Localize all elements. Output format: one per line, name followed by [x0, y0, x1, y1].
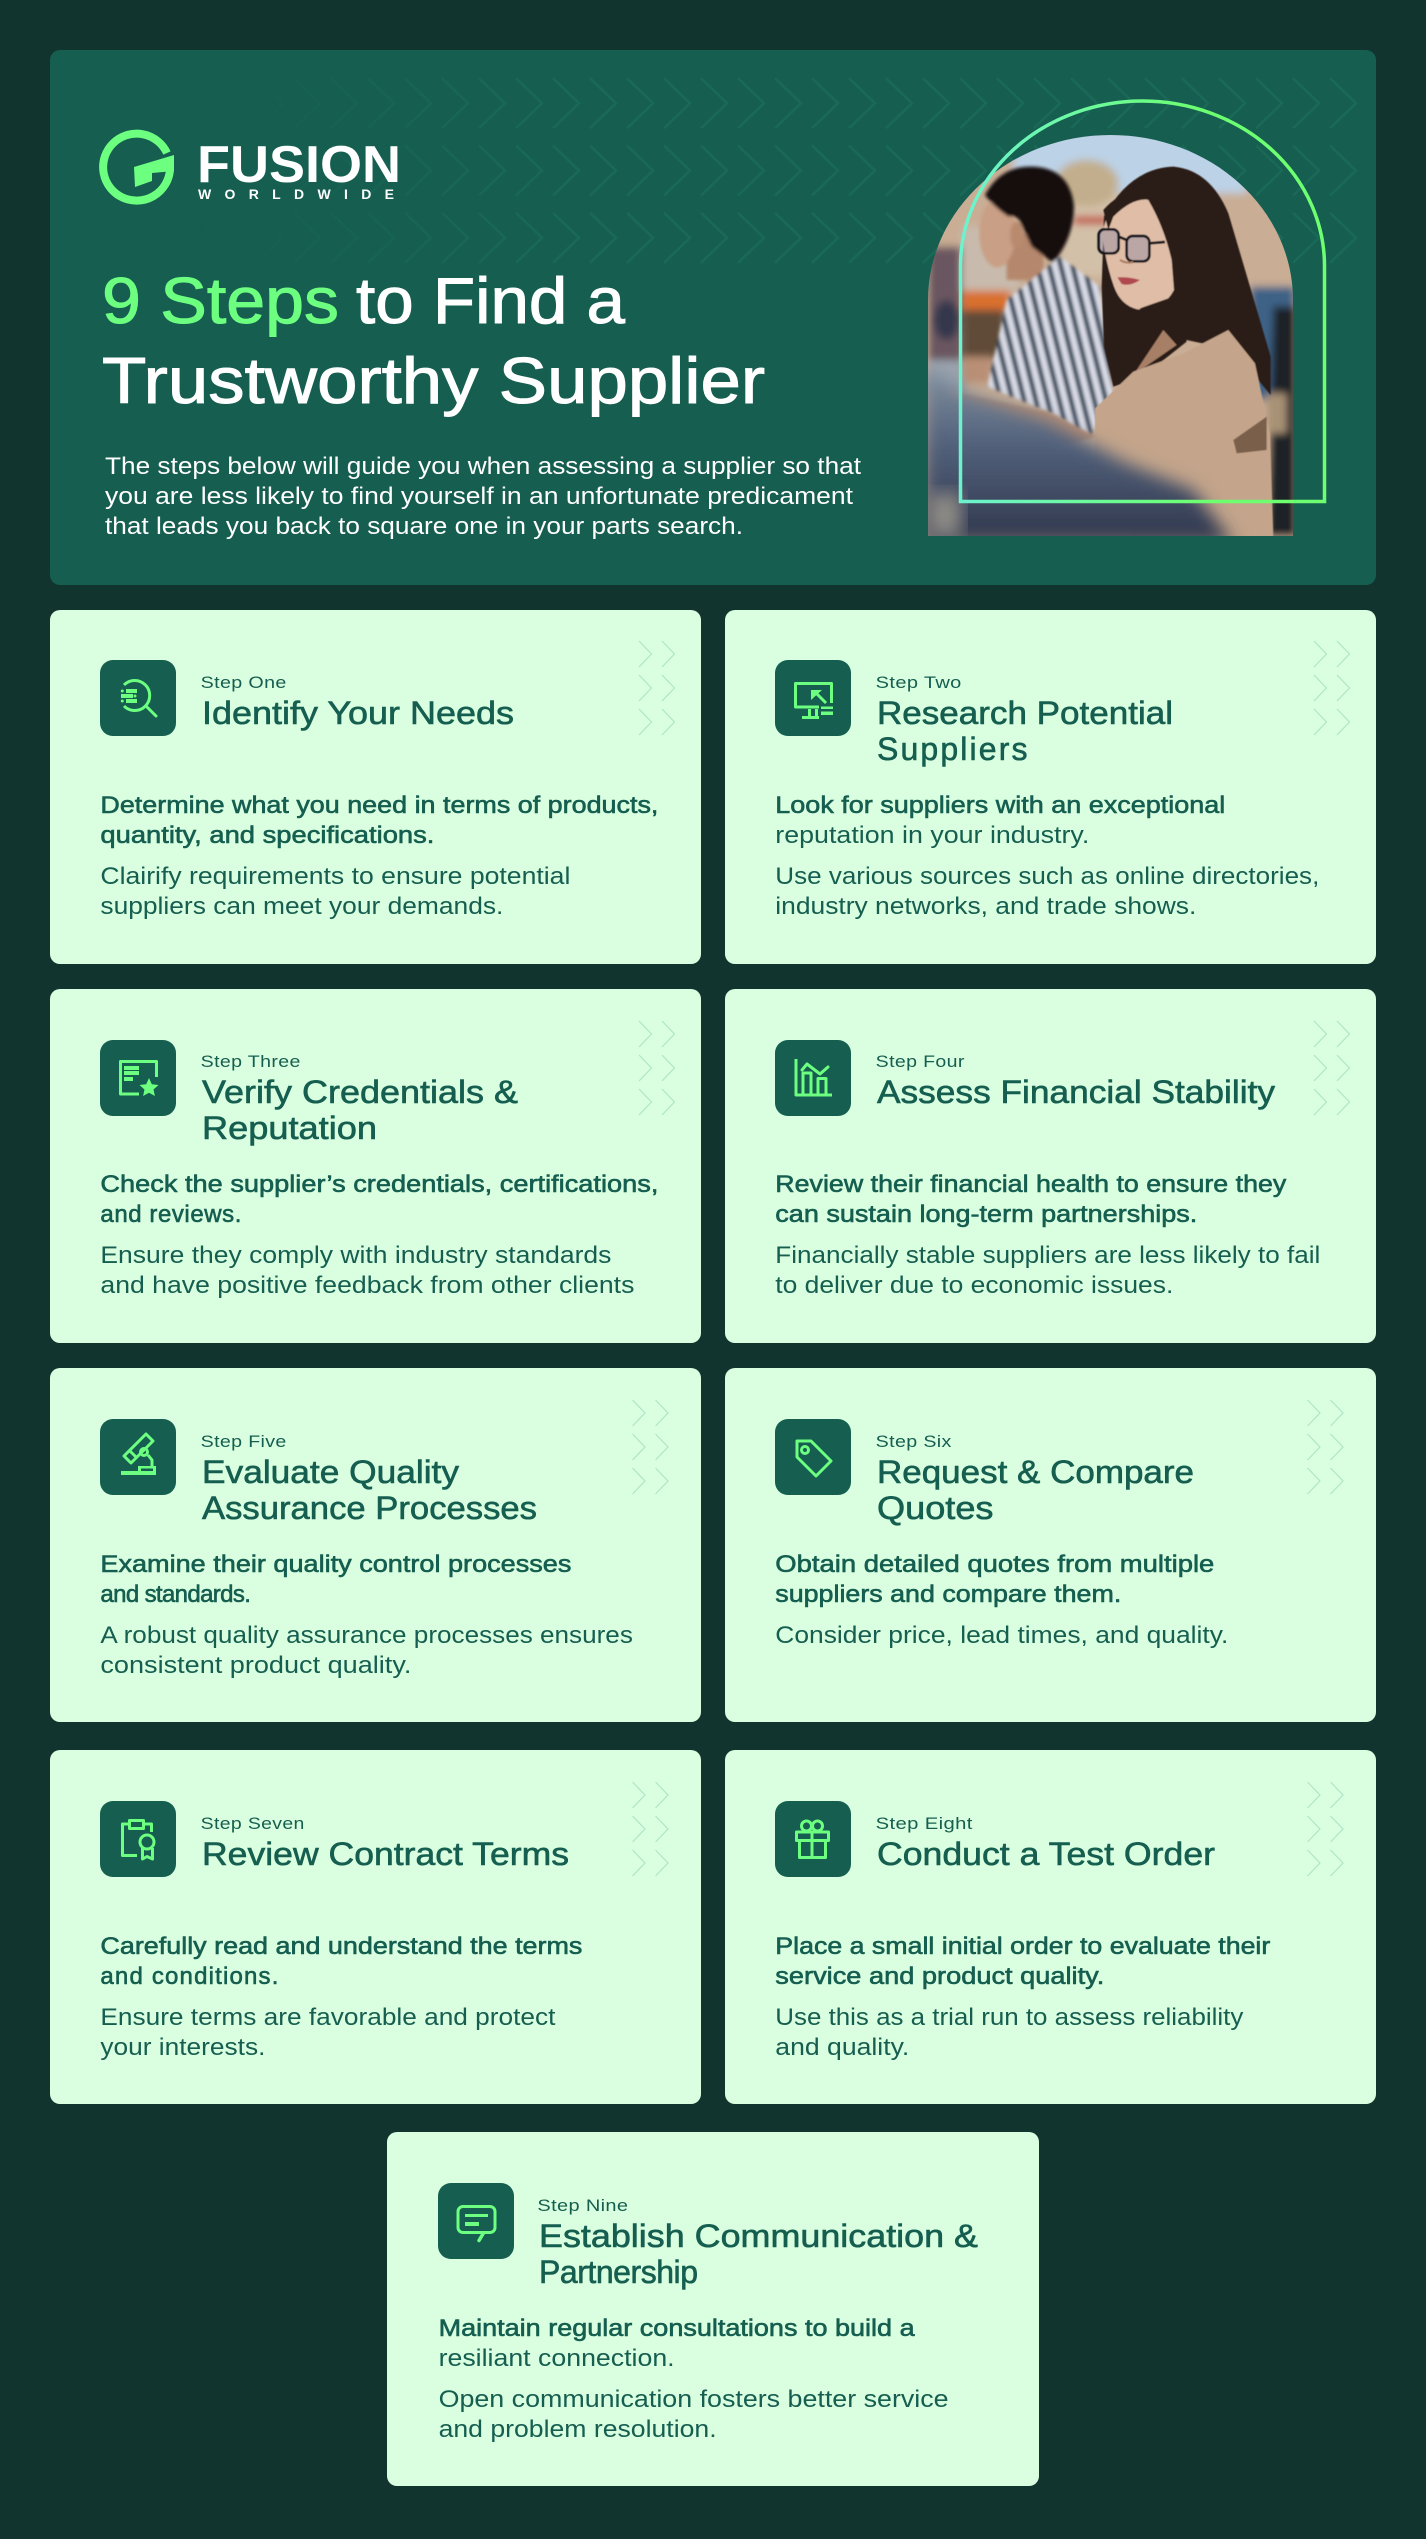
panel: step eight: [725, 1750, 1376, 2104]
step body: [775, 1551, 1228, 1649]
intro paragraph: [105, 453, 861, 540]
step label: Step Four: [876, 1052, 965, 1071]
step title: Evaluate Quality: [202, 1454, 459, 1490]
intro paragraph: that leads you back to square one in your parts search.: [105, 513, 743, 540]
icon: bar chart with trend line: [775, 1040, 851, 1116]
chevrons: [639, 641, 674, 735]
step body: your interests.: [100, 2034, 265, 2061]
step body: resiliant connection.: [439, 2345, 675, 2372]
step body: and have positive feedback from other clients: [100, 1272, 634, 1299]
step title: Assess Financial Stability: [877, 1074, 1275, 1110]
step label: Step Three: [201, 1052, 301, 1071]
step body: [100, 1933, 582, 2061]
step title: Establish Communication &: [539, 2218, 978, 2254]
chevrons: [639, 1021, 674, 1115]
hero background: [50, 50, 1376, 585]
step body: Ensure terms are favorable and protect: [100, 2004, 556, 2031]
woman face: [1102, 196, 1174, 309]
step body: Clairify requirements to ensure potential: [100, 863, 570, 890]
step body: Obtain detailed quotes from multiple: [775, 1551, 1214, 1578]
chevrons: [1314, 641, 1350, 735]
step title: Review Contract Terms: [202, 1836, 569, 1872]
step body: Ensure they comply with industry standards: [100, 1242, 611, 1269]
step body: [100, 1171, 658, 1299]
panel: hero header: [50, 50, 1376, 585]
man: [1007, 233, 1043, 280]
icon: gift box: [775, 1801, 851, 1877]
step body: suppliers can meet your demands.: [100, 893, 503, 920]
step title: [877, 1454, 1194, 1526]
step body: Open communication fosters better service: [439, 2386, 949, 2413]
title: Trustworthy Supplier: [102, 344, 765, 417]
woman blouse: [1095, 330, 1273, 537]
step title: Identify Your Needs: [202, 695, 514, 731]
step title: Quotes: [877, 1490, 994, 1526]
icon: monitor with cursor: [775, 660, 851, 736]
step title: Verify Credentials &: [202, 1074, 518, 1110]
step body: industry networks, and trade shows.: [775, 893, 1196, 920]
step body: Financially stable suppliers are less likely to fail: [775, 1242, 1320, 1269]
step body: [439, 2315, 949, 2443]
step title: Reputation: [202, 1110, 377, 1146]
step label: Step Five: [201, 1432, 287, 1451]
woman hair: [1102, 167, 1271, 395]
step body: and conditions.: [100, 1963, 278, 1990]
step title: Assurance Processes: [202, 1490, 537, 1526]
step body: Use this as a trial run to assess reliability: [775, 2004, 1243, 2031]
step body: and standards.: [100, 1581, 251, 1608]
woman neck: [1140, 298, 1188, 362]
step body: and quality.: [775, 2034, 909, 2061]
step body: suppliers and compare them.: [775, 1581, 1121, 1608]
chevron pattern: [456, 78, 1358, 264]
step title: Suppliers: [877, 731, 1028, 767]
step label: Step Eight: [876, 1814, 973, 1833]
step body: [775, 1171, 1320, 1299]
panel: step four: [725, 989, 1376, 1343]
panel: step two: [725, 610, 1376, 964]
step body: Look for suppliers with an exceptional: [775, 792, 1225, 819]
icon: chat bubble: [438, 2183, 514, 2259]
step body: [775, 792, 1319, 920]
icon: certificate with star: [100, 1040, 176, 1116]
panel: step five: [50, 1368, 701, 1722]
blurred foreground: [964, 394, 1094, 440]
chevrons: [1314, 1021, 1350, 1115]
panel: step one: [50, 610, 701, 964]
step body: Maintain regular consultations to build a: [439, 2315, 915, 2342]
step body: and problem resolution.: [439, 2416, 717, 2443]
step body: can sustain long-term partnerships.: [775, 1201, 1197, 1228]
intro paragraph: you are less likely to find yourself in an unfortunate predicament: [105, 483, 853, 510]
chevrons: [632, 1400, 668, 1494]
chevrons: [632, 1782, 668, 1876]
icon: microscope: [100, 1419, 176, 1495]
chevrons: [1308, 1400, 1343, 1494]
step body: Place a small initial order to evaluate their: [775, 1933, 1270, 1960]
glasses: [1099, 229, 1149, 261]
icon: logo ring with flag: [103, 134, 174, 201]
logo subtitle: WORLDWIDE: [198, 186, 394, 202]
step title: Request & Compare: [877, 1454, 1194, 1490]
step body: Determine what you need in terms of products,: [100, 792, 658, 819]
intro paragraph: The steps below will guide you when assessing a supplier so that: [105, 453, 861, 480]
step title: Research Potential: [877, 695, 1173, 731]
step body: [100, 1551, 633, 1679]
step body: service and product quality.: [775, 1963, 1104, 1990]
step label: Step Two: [876, 673, 962, 692]
icon: magnifier with list: [100, 660, 176, 736]
step label: Step One: [201, 673, 287, 692]
step title: [202, 1454, 537, 1526]
step label: Step Seven: [201, 1814, 305, 1833]
step body: Check the supplier’s credentials, certifications,: [100, 1171, 658, 1198]
step body: A robust quality assurance processes ensures: [100, 1622, 633, 1649]
step body: consistent product quality.: [100, 1652, 411, 1679]
photo: woman and colleague in office: [920, 127, 1300, 543]
icon: clipboard with award: [100, 1801, 176, 1877]
step title: [877, 695, 1173, 767]
panel: step six: [725, 1368, 1376, 1722]
panel: step nine: [387, 2132, 1039, 2486]
step body: Review their financial health to ensure they: [775, 1171, 1286, 1198]
title: [102, 264, 765, 417]
step title: Partnership: [539, 2254, 698, 2290]
step body: quantity, and specifications.: [100, 822, 434, 849]
step body: Consider price, lead times, and quality.: [775, 1622, 1228, 1649]
arch outline: [960, 101, 1324, 501]
step body: and reviews.: [100, 1201, 241, 1228]
title: to Find a: [356, 264, 626, 337]
step title: [539, 2218, 978, 2290]
logo wordmark: FUSION: [197, 136, 401, 194]
step body: to deliver due to economic issues.: [775, 1272, 1173, 1299]
step body: Carefully read and understand the terms: [100, 1933, 582, 1960]
step body: Use various sources such as online directories,: [775, 863, 1319, 890]
panel: step seven: [50, 1750, 701, 2104]
chevrons: [1308, 1782, 1343, 1876]
icon: price tag: [775, 1419, 851, 1495]
step label: Step Nine: [537, 2196, 628, 2215]
step title: Conduct a Test Order: [877, 1836, 1215, 1872]
step body: [100, 792, 658, 920]
title: 9 Steps: [102, 264, 339, 337]
panel: step three: [50, 989, 701, 1343]
step body: Examine their quality control processes: [100, 1551, 571, 1578]
step label: Step Six: [876, 1432, 952, 1451]
step title: [202, 1074, 518, 1146]
step body: reputation in your industry.: [775, 822, 1089, 849]
logo: Fusion Worldwide: [103, 134, 401, 202]
step body: [775, 1933, 1270, 2061]
